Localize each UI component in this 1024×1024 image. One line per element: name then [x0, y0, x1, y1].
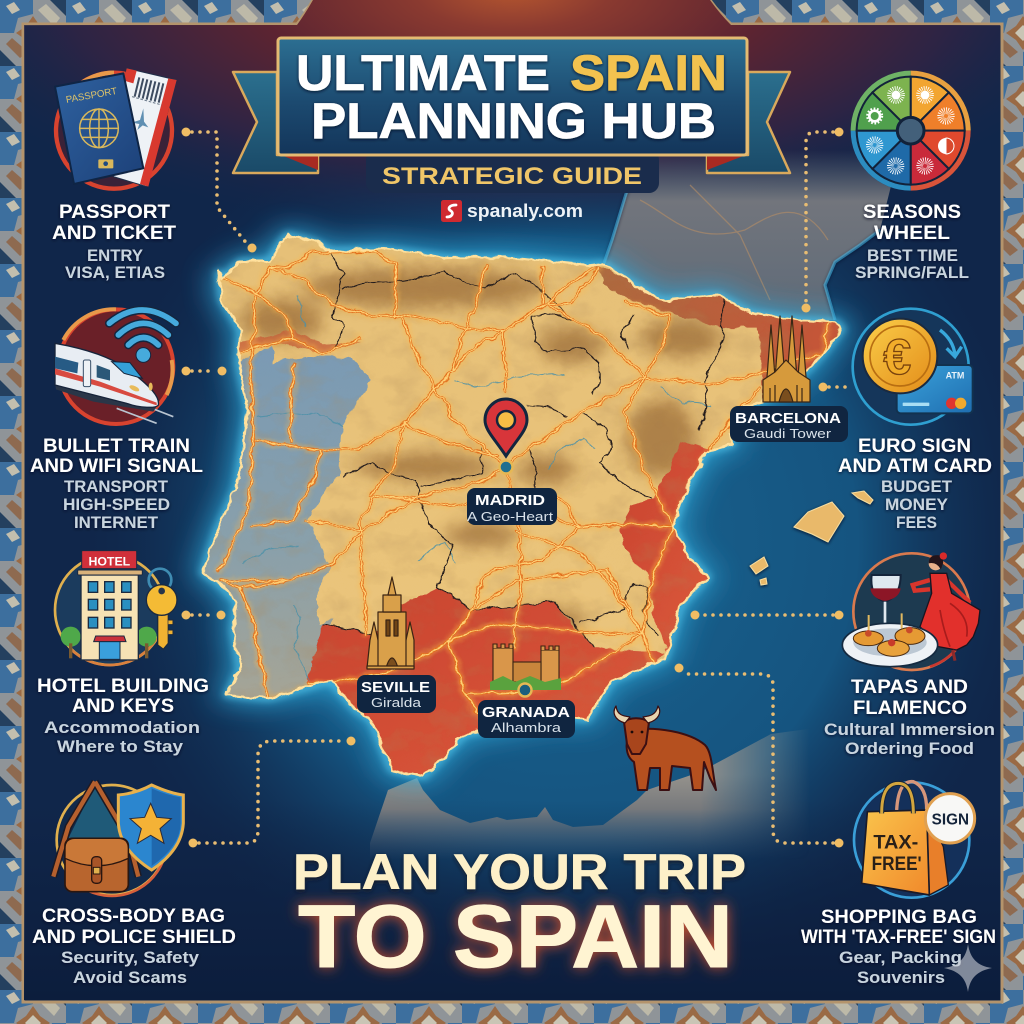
subtitle pill: [366, 150, 659, 193]
label text: [52, 202, 176, 282]
icon: passport and ticket: [55, 68, 177, 189]
brand: spanaly.com: [441, 200, 583, 222]
city label: Seville: [357, 675, 436, 713]
map: rivers: [244, 295, 710, 681]
city label: Madrid: [467, 488, 557, 525]
headline line two: TO SPAIN: [298, 886, 733, 986]
label text: FLAMENCO: [853, 698, 967, 719]
label text: CROSS-BODY BAG: [42, 906, 225, 927]
icon: hotel and key: [55, 551, 177, 665]
connector: shopping to map: [674, 664, 844, 848]
map: France landmass: [604, 150, 900, 320]
icon: bullet train and wifi: [55, 309, 176, 424]
city label: Barcelona: Gaudi Tower: [744, 426, 832, 441]
label text: INTERNET: [74, 513, 159, 532]
city label: Madrid: A Geo-Heart: [467, 509, 553, 524]
landmark: Sagrada Familia tower: [763, 316, 810, 402]
label text: ENTRY: [87, 246, 144, 265]
landmark: Giralda tower: [367, 577, 414, 669]
label text: HOTEL BUILDING: [37, 676, 209, 697]
panel: tapas and flamenco: [824, 552, 995, 758]
title text: [296, 45, 727, 149]
icon: tax-free shopping bag: [854, 782, 975, 898]
icon: euro coin and ATM card: €: [883, 329, 911, 385]
label text: [801, 907, 996, 987]
panel: shopping bag with tax-free sign: [801, 782, 996, 987]
label text: PASSPORT: [59, 202, 170, 223]
panel: seasons wheel: [851, 71, 971, 282]
connector: tapas to map: [690, 610, 844, 620]
icon: euro coin and ATM card: [853, 309, 973, 425]
label text: Where to Stay: [57, 737, 184, 756]
label text: SPRING/FALL: [855, 263, 969, 282]
title banner: [233, 38, 790, 193]
landmark: Alhambra fortress: [490, 644, 561, 696]
label text: AND TICKET: [52, 223, 176, 244]
label text: EURO SIGN: [858, 436, 971, 457]
city label: Granada: GRANADA: [482, 704, 570, 721]
icon: tapas, wine and dancer: [842, 552, 980, 670]
label text: [32, 906, 236, 987]
label text: Avoid Scams: [73, 968, 187, 987]
label text: Souvenirs: [857, 968, 945, 987]
icon: euro coin and ATM card: ATM: [946, 371, 964, 381]
headline line one: PLAN YOUR TRIP: [293, 844, 746, 900]
label text: AND WIFI SIGNAL: [30, 456, 203, 477]
city label: Madrid: MADRID: [475, 492, 545, 509]
city label: Seville: SEVILLE: [361, 679, 430, 696]
map: Portugal: [204, 346, 370, 698]
label text: SHOPPING BAG: [821, 907, 977, 928]
map: northern red band: [596, 263, 844, 399]
map: region borders: [322, 252, 722, 649]
icon: tax-free shopping bag: TAX-: [873, 833, 918, 854]
label text: TAPAS AND: [851, 677, 968, 698]
map: Balearic islands: [750, 491, 873, 585]
label text: Accommodation: [44, 718, 200, 737]
ribbon folds: [281, 155, 746, 170]
connector: euro to map: [818, 382, 846, 392]
label text: HIGH-SPEED: [63, 495, 170, 514]
connector: seasons to map: [802, 128, 844, 312]
panel: bullet train and wifi: [30, 309, 203, 532]
map: road network: [220, 250, 828, 727]
ribbon left: [233, 72, 318, 173]
label text: [855, 202, 969, 282]
label text: [824, 677, 995, 758]
map: coastline glow: [203, 234, 842, 777]
city label: Seville: Giralda: [371, 695, 422, 710]
panel: passport and ticket: [52, 68, 177, 282]
label text: SEASONS: [863, 202, 961, 223]
label text: Cultural Immersion: [824, 720, 995, 739]
label text: AND POLICE SHIELD: [32, 927, 236, 948]
label text: [30, 436, 203, 532]
ribbon right: [707, 72, 790, 173]
map: Andalusia red south: [306, 588, 665, 781]
panel: cross-body bag and shield: [32, 782, 236, 987]
subtitle: STRATEGIC GUIDE: [382, 163, 642, 190]
connector: passport to map: [182, 128, 256, 252]
map: mountain relief: [240, 268, 722, 634]
label text: Ordering Food: [845, 739, 974, 758]
map pin: Madrid: [485, 399, 527, 474]
panel: euro sign and ATM card: [838, 309, 992, 532]
map: Valencia red coast: [618, 441, 710, 659]
label text: [838, 436, 992, 532]
connector: train to map: [182, 366, 226, 376]
label text: WITH 'TAX-FREE' SIGN: [801, 927, 996, 948]
connector: bag to map: [188, 736, 356, 848]
title text: SPAIN: [570, 45, 727, 101]
map: North Africa landmass: [370, 728, 815, 860]
label text: VISA, ETIAS: [65, 263, 165, 282]
icon: passport and ticket: PASSPORT: [65, 86, 118, 106]
label text: Gear, Packing: [839, 948, 962, 967]
city label: Barcelona: BARCELONA: [735, 410, 841, 427]
label text: BUDGET: [881, 477, 953, 496]
title box: [278, 38, 747, 155]
label text: [37, 676, 209, 756]
icon: sparkle watermark: [944, 944, 992, 992]
label text: Security, Safety: [61, 948, 200, 967]
connector: hotel to map: [182, 610, 226, 620]
icon: bag and shield: [53, 782, 183, 896]
icon: tax-free shopping bag: FREE': [872, 854, 922, 875]
label text: BULLET TRAIN: [43, 436, 190, 457]
icon: bull: [614, 706, 716, 790]
label text: MONEY: [885, 495, 949, 514]
label text: AND KEYS: [72, 696, 174, 717]
city label: Barcelona: [730, 406, 848, 442]
icon: tax-free shopping bag: SIGN: [932, 811, 969, 828]
headline: plan your trip to Spain: [293, 844, 746, 986]
title text: PLANNING HUB: [311, 93, 716, 149]
brand: spanaly.com: spanaly.com: [467, 201, 583, 221]
label text: WHEEL: [874, 223, 950, 244]
panel: hotel building and keys: [37, 551, 209, 756]
map: terrain texture: [204, 258, 840, 766]
label text: BEST TIME: [867, 246, 958, 265]
icon: hotel and key: HOTEL: [88, 554, 131, 568]
title text: ULTIMATE: [296, 45, 550, 101]
map: Iberian peninsula: [196, 227, 857, 784]
city label: Granada: Alhambra: [491, 720, 562, 735]
label text: TRANSPORT: [64, 477, 169, 496]
label text: FEES: [896, 513, 937, 532]
label text: AND ATM CARD: [838, 456, 992, 477]
icon: seasons wheel: [851, 71, 971, 191]
city label: Granada: [478, 700, 575, 738]
